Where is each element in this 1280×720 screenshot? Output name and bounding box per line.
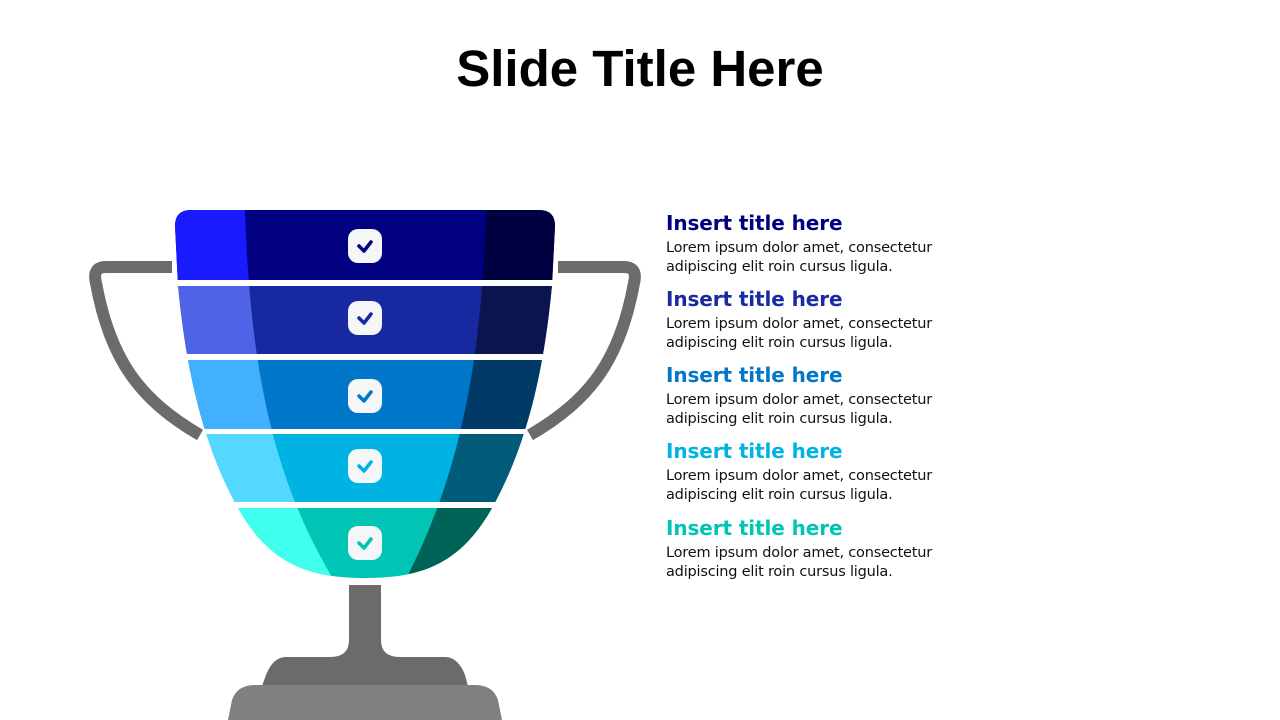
icon: check 1 (348, 229, 382, 263)
icon: check 5 (348, 526, 382, 560)
text block 1: adipiscing elit roin cursus ligula. (666, 259, 893, 275)
text block 3 (666, 363, 932, 427)
text block 5: Insert title here (666, 516, 842, 540)
text block 5: Lorem ipsum dolor amet, consectetur (666, 545, 932, 561)
handle: right (530, 267, 635, 435)
text block 5 (666, 516, 932, 580)
text block 4: Lorem ipsum dolor amet, consectetur (666, 468, 932, 484)
icon: check 2 (348, 301, 382, 335)
text block 4 (666, 439, 932, 503)
icon: check 4 (348, 449, 382, 483)
text block 2: Insert title here (666, 287, 842, 311)
text block 1: Lorem ipsum dolor amet, consectetur (666, 240, 932, 256)
text block 2: Lorem ipsum dolor amet, consectetur (666, 316, 932, 332)
base (228, 685, 502, 720)
text block 2: adipiscing elit roin cursus ligula. (666, 335, 893, 351)
cup bands (175, 210, 555, 578)
title: Slide Title Here (456, 40, 824, 97)
icon: check 3 (348, 379, 382, 413)
text block 5: adipiscing elit roin cursus ligula. (666, 564, 893, 580)
handle: left (95, 267, 200, 435)
text block 3: Insert title here (666, 363, 842, 387)
text block 4: adipiscing elit roin cursus ligula. (666, 487, 893, 503)
text block 4: Insert title here (666, 439, 842, 463)
text block 3: adipiscing elit roin cursus ligula. (666, 411, 893, 427)
text block 1: Insert title here (666, 211, 842, 235)
text block 3: Lorem ipsum dolor amet, consectetur (666, 392, 932, 408)
stem (262, 585, 468, 686)
text block 2 (666, 287, 932, 351)
trophy (89, 210, 641, 720)
text block 1 (666, 211, 932, 275)
